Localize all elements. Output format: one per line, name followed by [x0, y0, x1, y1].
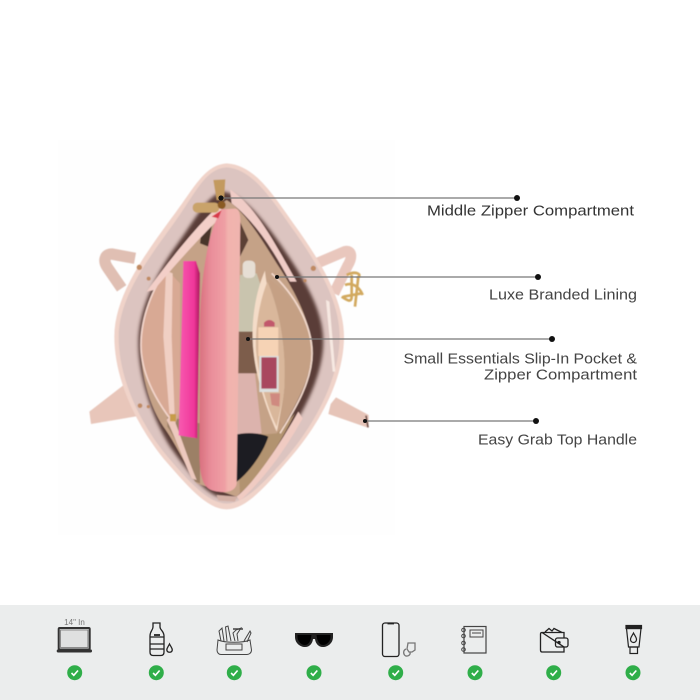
gold zip tab: [170, 414, 176, 421]
zipper strip right: [230, 189, 297, 282]
icon: makeup pouch: [217, 626, 252, 654]
callout: Luxe Branded Lining: Luxe Branded Lining: [489, 288, 637, 304]
top left handle: [105, 254, 135, 288]
icon: wallet: [540, 628, 568, 652]
right pocket edge: [272, 273, 312, 433]
left lining pocket: [141, 270, 180, 425]
green check 6: [468, 665, 482, 680]
callout: Small Essentials Slip-In Pocket and Zipper Compartment: Zipper Compartment: [484, 368, 637, 384]
callout: Easy Grab Top Handle: Easy Grab Top Handle: [478, 432, 637, 448]
lower right olive lining: [237, 413, 295, 493]
zipper strip left: [147, 205, 223, 292]
green check 5: [388, 665, 403, 680]
green check 7: [546, 665, 561, 680]
compatibility strip: [0, 605, 700, 700]
callout: Middle Zipper Compartment: Middle Zipper Compartment: [427, 204, 634, 220]
green check 2: [149, 665, 164, 680]
green check 4: [306, 665, 322, 680]
green check 3: [227, 665, 242, 680]
left pocket edge: [163, 271, 175, 417]
bag inner flap: [119, 167, 340, 504]
gold zipper pull: [193, 179, 226, 218]
icon: water bottle: [150, 623, 172, 656]
right lining stripe: [268, 278, 311, 433]
callout: Small Essentials Slip-In Pocket and Zipper Compartment: [246, 336, 637, 384]
middle compartment tan lining: [141, 200, 311, 497]
gold rivets: [137, 265, 316, 408]
icon: spiral notebook: [462, 626, 486, 653]
icon: sunglasses: [295, 633, 333, 647]
lower zipper strip left: [167, 413, 197, 480]
callout: Small Essentials Slip-In Pocket and Zipper Compartment: Small Essentials Slip-In Pocket &: [404, 352, 637, 368]
pink notebook: [179, 261, 200, 438]
icon: cream tube: [626, 626, 642, 654]
bag illustration: [89, 163, 369, 509]
bottom seam: [217, 495, 237, 502]
small essentials pocket: [253, 271, 285, 432]
lower zipper strip right: [237, 412, 303, 501]
green check 8: [626, 665, 640, 680]
dark cap item: [232, 433, 268, 485]
cosmetic bottle: [237, 332, 260, 373]
inner dark cavity: [138, 192, 323, 498]
icon: laptop 14 inch: [57, 618, 92, 652]
callout: Easy Grab Top Handle: [363, 418, 637, 448]
bottom right handle: [328, 397, 369, 428]
dark gap behind sleeve top: [200, 217, 213, 247]
gold charm: [342, 273, 363, 307]
side slit: [326, 300, 335, 372]
perfume bottle: [237, 273, 262, 332]
lower left olive lining: [167, 417, 200, 483]
icon: phone and charger: [382, 623, 415, 656]
laptop sleeve: [199, 209, 240, 492]
top right handle: [318, 251, 351, 293]
callout: Middle Zipper Compartment: [218, 195, 634, 220]
green check 1: [67, 665, 82, 680]
lip gloss: [259, 356, 279, 392]
bottom left handle: [89, 384, 138, 424]
bag outer rim: [114, 163, 344, 509]
callout: Luxe Branded Lining: [275, 274, 637, 304]
icon: laptop 14 inch: 14" In: [64, 618, 85, 627]
